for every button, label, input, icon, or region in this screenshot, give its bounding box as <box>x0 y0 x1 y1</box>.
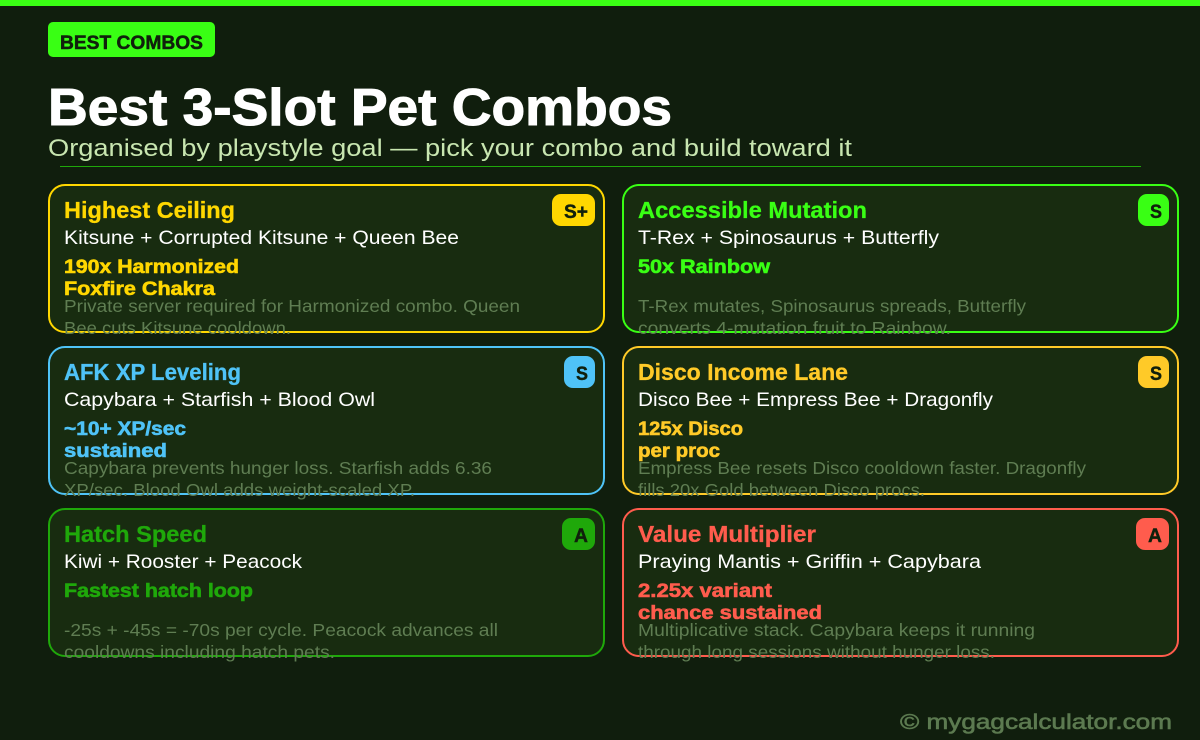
panel: Hatch Speed <box>49 509 604 662</box>
card heading: Value Multiplier <box>638 521 816 547</box>
tier badge S: S <box>1150 202 1162 223</box>
result: Foxfire Chakra <box>64 278 215 300</box>
panel: Disco Income Lane <box>623 347 1178 500</box>
title: Best 3-Slot Pet Combos <box>48 79 672 137</box>
tier badge A <box>1136 518 1169 550</box>
result: Fastest hatch loop <box>64 580 253 602</box>
footer credit: © mygagcalculator.com <box>900 710 1172 734</box>
description: XP/sec. Blood Owl adds weight-scaled XP. <box>64 480 415 500</box>
result <box>638 580 822 624</box>
description: cooldowns including hatch pets. <box>64 642 335 662</box>
combo: Kiwi + Rooster + Peacock <box>64 551 302 573</box>
tier badge A: A <box>1148 526 1162 547</box>
result: 190x Harmonized <box>64 256 239 278</box>
card heading: Disco Income Lane <box>638 359 848 385</box>
description: Bee cuts Kitsune cooldown. <box>64 318 291 338</box>
result: 50x Rainbow <box>638 256 771 278</box>
tier badge S+: S+ <box>564 202 588 223</box>
description <box>64 458 492 500</box>
description <box>638 620 1035 662</box>
result: chance sustained <box>638 602 822 624</box>
combo: Capybara + Starfish + Blood Owl <box>64 389 375 411</box>
description <box>64 620 498 662</box>
description: converts 4-mutation fruit to Rainbow. <box>638 318 951 338</box>
tier badge A <box>562 518 595 550</box>
description: Private server required for Harmonized combo. Queen <box>64 296 520 316</box>
panel: Highest Ceiling <box>49 185 604 338</box>
combo: Disco Bee + Empress Bee + Dragonfly <box>638 389 993 411</box>
card heading: AFK XP Leveling <box>64 359 241 385</box>
result: sustained <box>64 440 167 462</box>
result <box>64 418 186 462</box>
tier badge S: S <box>576 364 588 385</box>
subtitle: Organised by playstyle goal — pick your combo and build toward it <box>48 135 852 162</box>
description: fills 20x Gold between Disco procs. <box>638 480 925 500</box>
card heading: Highest Ceiling <box>64 197 235 223</box>
description: through long sessions without hunger loss. <box>638 642 995 662</box>
tier badge S: S <box>1150 364 1162 385</box>
description: Capybara prevents hunger loss. Starfish adds 6.36 <box>64 458 492 478</box>
panel: Value Multiplier <box>623 509 1178 662</box>
result <box>638 418 743 462</box>
description: Empress Bee resets Disco cooldown faster. Dragonfly <box>638 458 1086 478</box>
panel: Accessible Mutation <box>623 185 1178 338</box>
category badge <box>48 22 215 57</box>
result <box>64 256 239 300</box>
card heading: Hatch Speed <box>64 521 207 547</box>
tier badge S <box>564 356 595 388</box>
description: Multiplicative stack. Capybara keeps it running <box>638 620 1035 640</box>
combo: Kitsune + Corrupted Kitsune + Queen Bee <box>64 227 459 249</box>
result: 125x Disco <box>638 418 743 440</box>
tier badge S <box>1138 194 1169 226</box>
description <box>638 296 1026 338</box>
description: -25s + -45s = -70s per cycle. Peacock advances all <box>64 620 498 640</box>
tier badge S+ <box>552 194 595 226</box>
description <box>638 458 1086 500</box>
description <box>64 296 520 338</box>
category badge: BEST COMBOS <box>60 32 203 54</box>
description: T-Rex mutates, Spinosaurus spreads, Butterfly <box>638 296 1026 316</box>
combo: T-Rex + Spinosaurus + Butterfly <box>638 227 939 249</box>
result: 2.25x variant <box>638 580 773 602</box>
card heading: Accessible Mutation <box>638 197 867 223</box>
result: ~10+ XP/sec <box>64 418 186 440</box>
combo: Praying Mantis + Griffin + Capybara <box>638 551 981 573</box>
result: per proc <box>638 440 720 462</box>
tier badge S <box>1138 356 1169 388</box>
tier badge A: A <box>574 526 588 547</box>
panel: AFK XP Leveling <box>49 347 604 500</box>
